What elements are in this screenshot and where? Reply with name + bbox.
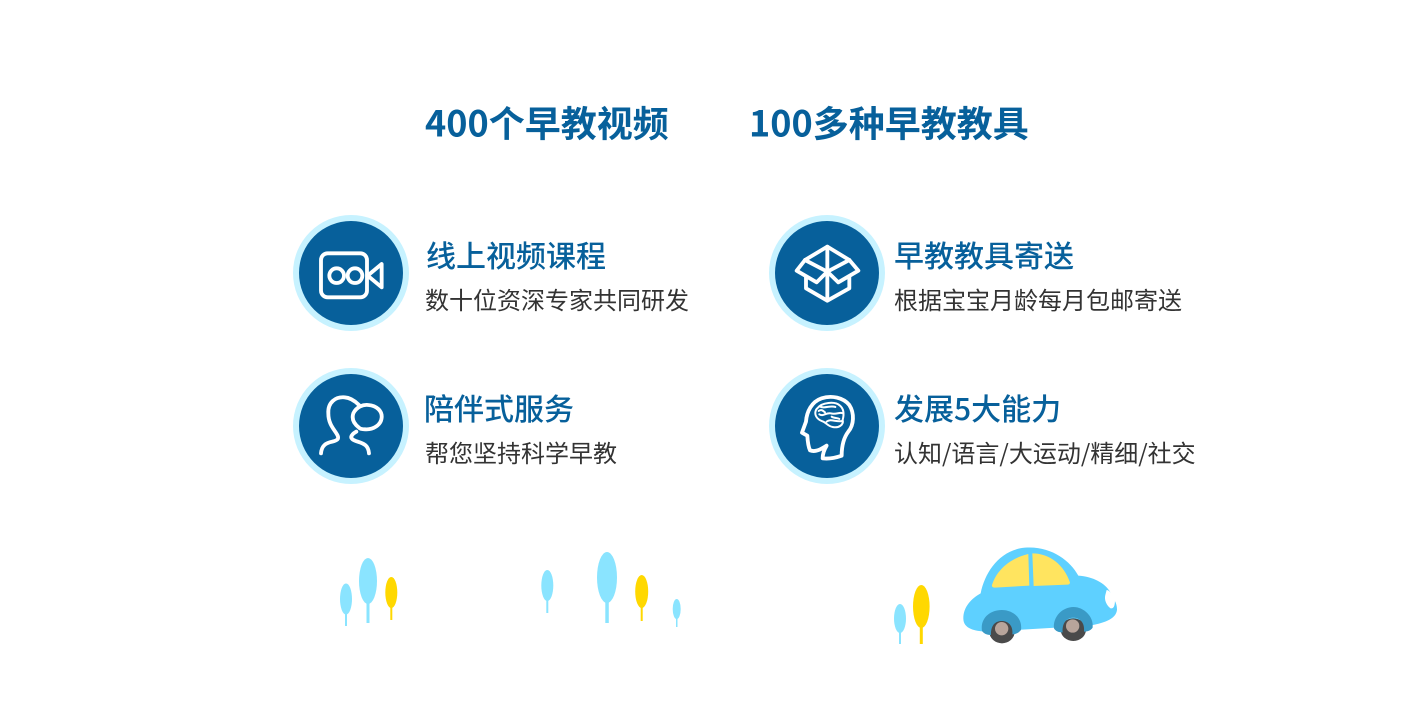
title: online video courses: 线上视频课程 xyxy=(426,232,606,276)
panel: companion service xyxy=(293,368,617,484)
description: companion service: 帮您坚持科学早教 xyxy=(425,434,617,469)
icon: head with brain xyxy=(769,368,885,484)
title: toy delivery: 早教教具寄送 xyxy=(894,232,1074,276)
illustration: blue car xyxy=(963,547,1117,643)
panel: five abilities xyxy=(769,368,1196,484)
title: companion service: 陪伴式服务 xyxy=(424,385,574,429)
description: online video courses: 数十位资深专家共同研发 xyxy=(425,281,689,316)
decoration: right trees xyxy=(894,585,930,644)
panel: toy delivery xyxy=(769,215,1182,331)
description: toy delivery: 根据宝宝月龄每月包邮寄送 xyxy=(894,281,1182,316)
icon: open box xyxy=(769,215,885,331)
decoration: left trees xyxy=(340,558,397,626)
title: five abilities: 发展5大能力 xyxy=(894,385,1061,429)
icon: video camera xyxy=(293,215,409,331)
heading: video count: 400个早教视频 xyxy=(425,96,669,148)
decoration: middle trees xyxy=(541,552,681,627)
heading: toy count: 100多种早教教具 xyxy=(749,96,1029,148)
panel: online video courses xyxy=(293,215,689,331)
description: five abilities: 认知/语言/大运动/精细/社交 xyxy=(894,434,1196,469)
icon: person with speech bubble xyxy=(293,368,409,484)
